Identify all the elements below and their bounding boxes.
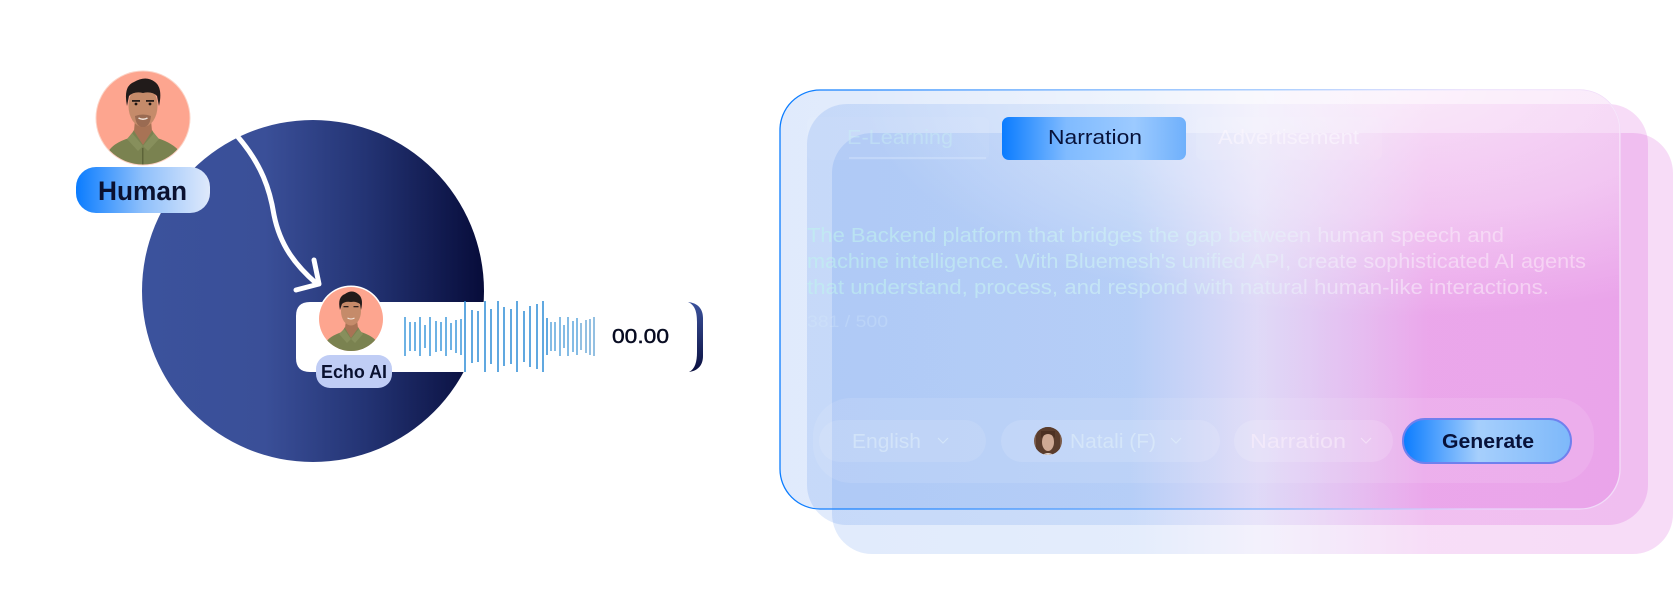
human label pill: Human [98,176,187,206]
language dropdown: English [852,431,921,453]
middle glass panel [807,104,1648,525]
style dropdown: Narration [1250,431,1346,453]
front glass panel [780,90,1620,509]
timer: 00.00 [612,326,669,348]
generate button [1403,419,1571,463]
body description text [807,225,1586,299]
narration tab active [1002,117,1186,160]
curved arrow [238,137,319,290]
background disc [142,120,484,462]
card background [296,302,695,372]
echo ai avatar [318,286,384,354]
infographic canvas [76,70,1673,554]
e-learning tab [807,117,989,160]
human label pill [76,167,210,213]
body description text: that understand, process, and respond with natural human-like interactions. [807,277,1549,299]
bottom toolbar [813,398,1594,483]
back glass panel [832,133,1673,554]
character counter: 381 / 500 [807,312,888,331]
language dropdown [819,420,986,462]
style dropdown [1234,420,1393,462]
advertisement tab [1196,117,1382,160]
tabs row [807,117,1382,160]
generate button: Generate [1442,431,1534,453]
body description text: machine intelligence. With Bluemesh's unified API, create sophisticated AI agents [807,251,1586,273]
human avatar [96,70,190,168]
echo ai label pill [316,355,392,388]
audio player card [296,301,703,372]
voice dropdown: Natali (F) [1070,431,1156,453]
body description text: The Backend platform that bridges the gap between human speech and [807,225,1504,247]
icon: voice avatar [1034,426,1062,456]
echo ai label pill: Echo AI [321,361,387,382]
advertisement tab: Advertisement [1218,127,1359,149]
narration tab active: Narration [1048,127,1142,149]
voice dropdown [1034,427,1182,455]
dark crescent edge [688,302,703,372]
e-learning tab: E-Learning [847,127,953,149]
waveform [405,301,594,372]
